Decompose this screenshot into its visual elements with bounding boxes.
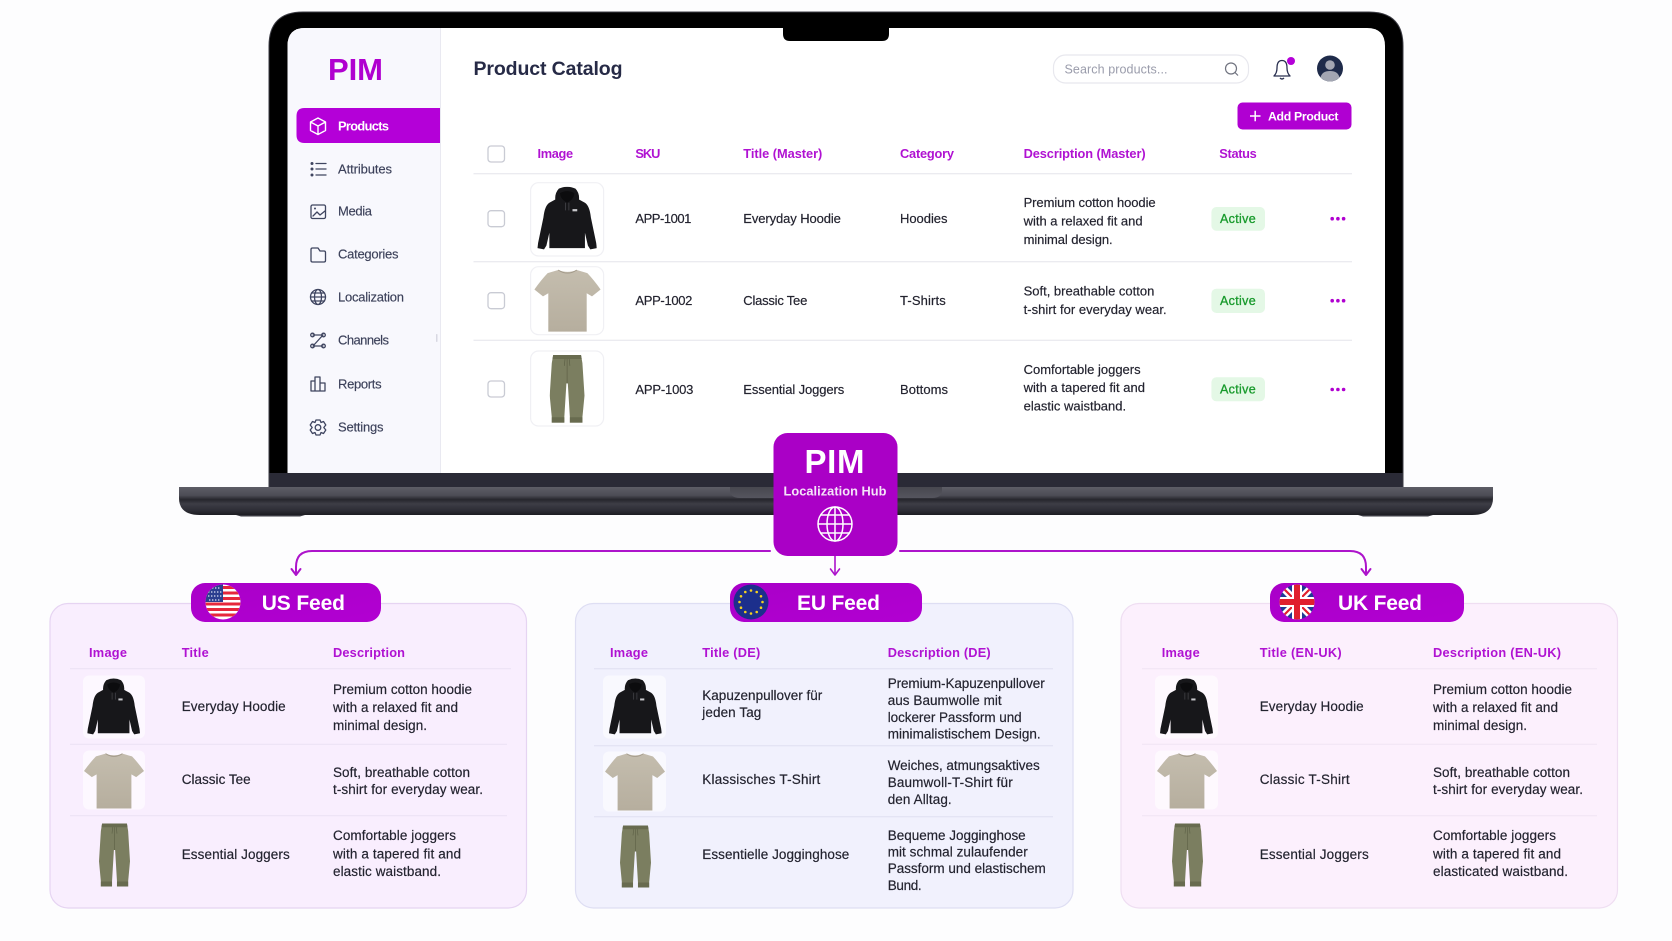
table header: Status bbox=[1219, 146, 1257, 161]
panel background bbox=[50, 604, 526, 908]
table header: Description (EN-UK) bbox=[1433, 645, 1561, 660]
table header: Image bbox=[89, 645, 127, 660]
row: joggers: Essentielle Jogginghose bbox=[702, 847, 849, 862]
row: APP-1003 bbox=[488, 351, 1345, 426]
row: APP-1001: Hoodies bbox=[900, 211, 948, 226]
row: tee: Classic T-Shirt bbox=[1260, 772, 1350, 787]
table header bbox=[1162, 645, 1561, 660]
row: APP-1001: APP-1001 bbox=[635, 211, 691, 226]
logo: PIM bbox=[328, 52, 383, 87]
row: hoodie: with a relaxed fit and bbox=[332, 700, 458, 715]
row: hoodie: Kapuzenpullover für bbox=[702, 688, 823, 703]
row: APP-1003: APP-1003 bbox=[635, 382, 693, 397]
table header: Image bbox=[1162, 645, 1200, 660]
row: joggers: Essential Joggers bbox=[1260, 847, 1369, 862]
row: APP-1001: minimal design. bbox=[1024, 232, 1113, 247]
badge: UK feed bbox=[1270, 583, 1464, 622]
row: hoodie: Everyday Hoodie bbox=[1260, 699, 1364, 714]
row: APP-1003: elastic waistband. bbox=[1024, 398, 1126, 414]
row: joggers: Bund. bbox=[888, 878, 922, 893]
master product table bbox=[474, 146, 1352, 426]
nav item: categories: Categories bbox=[338, 246, 399, 262]
panel: UK feed bbox=[1121, 583, 1618, 908]
nav item: media bbox=[311, 204, 373, 218]
row: hoodie: Everyday Hoodie bbox=[182, 699, 286, 714]
table header: Title (EN-UK) bbox=[1260, 645, 1342, 660]
row: APP-1003: with a tapered fit and bbox=[1023, 380, 1145, 395]
row: tee: Baumwoll-T-Shirt für bbox=[888, 775, 1013, 790]
nav item: settings bbox=[310, 420, 384, 435]
nav item: attributes bbox=[310, 162, 392, 176]
table header: Description (DE) bbox=[888, 645, 991, 660]
page title: Product Catalog bbox=[474, 58, 622, 80]
row: hoodie: jeden Tag bbox=[701, 705, 761, 720]
feed table bbox=[594, 645, 1053, 893]
icon: notification bell bbox=[1274, 57, 1295, 79]
panel: EU feed bbox=[576, 583, 1073, 908]
add product button: Add Product bbox=[1268, 110, 1338, 124]
PIM localization hub: PIM bbox=[804, 443, 864, 480]
PIM localization hub bbox=[774, 433, 898, 556]
badge: US feed bbox=[191, 583, 381, 622]
icon: EU flag bbox=[734, 584, 768, 620]
row: hoodie: minimal design. bbox=[1433, 718, 1527, 733]
row: APP-1001: with a relaxed fit and bbox=[1023, 214, 1143, 228]
laptop chin bbox=[270, 473, 1402, 488]
table header bbox=[89, 645, 405, 660]
row: tee: Soft, breathable cotton bbox=[333, 765, 470, 780]
row: APP-1001: Premium cotton hoodie bbox=[1024, 195, 1156, 210]
row: joggers: Essential Joggers bbox=[182, 847, 290, 862]
table header: Title (Master) bbox=[743, 146, 822, 161]
badge: EU feed: EU Feed bbox=[797, 592, 880, 615]
row: hoodie bbox=[603, 676, 1045, 742]
row: APP-1002: t-shirt for everyday wear. bbox=[1024, 302, 1167, 317]
table header bbox=[488, 146, 1257, 162]
laptop base bbox=[179, 487, 1493, 515]
row: APP-1001: Everyday Hoodie bbox=[743, 211, 841, 226]
nav item: channels: Channels bbox=[338, 332, 390, 348]
row: hoodie: lockerer Passform und bbox=[888, 710, 1022, 725]
row: APP-1002: APP-1002 bbox=[635, 293, 692, 308]
table header: Description (Master) bbox=[1024, 146, 1146, 161]
row: APP-1001: Active bbox=[1220, 212, 1256, 226]
badge: US feed: US Feed bbox=[262, 592, 345, 615]
row: joggers: Passform und elastischem bbox=[888, 861, 1046, 876]
table header: SKU bbox=[635, 146, 660, 161]
row: hoodie: Premium-Kapuzenpullover bbox=[888, 676, 1045, 691]
row: tee: t-shirt for everyday wear. bbox=[1433, 782, 1583, 797]
row: tee bbox=[603, 752, 1040, 812]
screen bbox=[288, 28, 1385, 473]
add product button bbox=[1238, 102, 1352, 130]
row: tee: den Alltag. bbox=[888, 792, 952, 807]
laptop lid and bezel bbox=[269, 12, 1403, 487]
nav item: reports bbox=[311, 376, 382, 392]
row: APP-1002: Active bbox=[1220, 294, 1256, 308]
nav item: products: Products bbox=[338, 118, 389, 134]
row: hoodie: Premium cotton hoodie bbox=[333, 682, 472, 697]
arrow: to EU feed bbox=[830, 556, 840, 575]
row: tee: Klassisches T-Shirt bbox=[702, 772, 821, 787]
row: hoodie: Premium cotton hoodie bbox=[1433, 682, 1572, 697]
row: tee: Classic Tee bbox=[182, 772, 251, 787]
row: tee: Soft, breathable cotton bbox=[1433, 765, 1570, 780]
feed table bbox=[70, 645, 511, 886]
nav item: products bbox=[296, 108, 440, 143]
nav item: attributes: Attributes bbox=[338, 162, 392, 176]
laptop bbox=[179, 12, 1493, 516]
nav item: categories bbox=[311, 246, 399, 262]
row: hoodie bbox=[1155, 676, 1572, 738]
row: hoodie: minimalistischem Design. bbox=[888, 726, 1041, 742]
table header: Category bbox=[900, 146, 955, 161]
row: hoodie bbox=[83, 676, 472, 738]
icon: avatar bbox=[1317, 56, 1343, 82]
search box bbox=[1054, 55, 1248, 83]
feed table bbox=[1142, 645, 1597, 886]
row: APP-1003: Bottoms bbox=[900, 382, 948, 397]
row: APP-1002: Classic Tee bbox=[743, 293, 807, 308]
sidebar background bbox=[288, 28, 440, 473]
table header: Title (DE) bbox=[702, 645, 760, 660]
row: joggers: with a tapered fit and bbox=[1432, 846, 1561, 862]
panel: US feed bbox=[50, 583, 526, 908]
row: APP-1003: Essential Joggers bbox=[743, 382, 845, 397]
row: tee: Weiches, atmungsaktives bbox=[888, 758, 1040, 773]
icon: US flag bbox=[205, 584, 241, 620]
row: APP-1002 bbox=[488, 267, 1345, 335]
icon: search bbox=[1226, 63, 1238, 76]
row: joggers: Comfortable joggers bbox=[333, 828, 456, 843]
sidebar bbox=[288, 28, 441, 473]
row: hoodie: with a relaxed fit and bbox=[1432, 700, 1558, 715]
row: tee bbox=[1155, 750, 1583, 810]
row: joggers: with a tapered fit and bbox=[332, 846, 461, 862]
PIM localization hub: Localization Hub bbox=[784, 484, 887, 498]
badge: UK feed: UK Feed bbox=[1338, 592, 1422, 615]
row: hoodie: aus Baumwolle mit bbox=[888, 693, 1002, 708]
nav item: reports: Reports bbox=[338, 376, 382, 392]
base opening notch bbox=[730, 487, 942, 498]
row: joggers: Comfortable joggers bbox=[1433, 828, 1556, 843]
table header bbox=[610, 645, 991, 660]
nav item: media: Media bbox=[338, 204, 373, 218]
row: APP-1003: Active bbox=[1220, 382, 1256, 396]
row: APP-1001 bbox=[488, 183, 1345, 256]
row: tee bbox=[83, 750, 483, 810]
camera notch bbox=[783, 27, 889, 41]
table header: Description bbox=[333, 645, 405, 660]
nav item: settings: Settings bbox=[338, 420, 384, 434]
row: APP-1002: T-Shirts bbox=[900, 293, 946, 308]
row: tee: t-shirt for everyday wear. bbox=[333, 782, 483, 797]
panel background bbox=[1121, 604, 1618, 908]
nav item: localization: Localization bbox=[338, 290, 404, 304]
badge: EU feed bbox=[730, 583, 922, 622]
row: joggers: elastic waistband. bbox=[333, 864, 441, 879]
panel background bbox=[576, 604, 1073, 908]
row: APP-1003: Comfortable joggers bbox=[1024, 362, 1141, 377]
arrow: to UK feed bbox=[900, 551, 1370, 575]
icon: globe bbox=[818, 507, 852, 541]
table header: Title bbox=[182, 645, 209, 660]
table header: Image bbox=[610, 645, 648, 660]
row: APP-1002: Soft, breathable cotton bbox=[1024, 284, 1154, 298]
row: hoodie: minimal design. bbox=[333, 718, 427, 733]
icon: UK flag bbox=[1279, 584, 1315, 620]
arrow: to US feed bbox=[292, 551, 770, 575]
table header: Image bbox=[538, 146, 573, 161]
row: joggers bbox=[620, 826, 1046, 893]
row: joggers bbox=[1172, 824, 1568, 886]
row: joggers: elasticated waistband. bbox=[1433, 864, 1568, 879]
row: joggers: Bequeme Jogginghose bbox=[888, 828, 1026, 843]
laptop feet bbox=[236, 515, 1433, 516]
search box: Search products... bbox=[1064, 62, 1168, 76]
nav item: channels bbox=[311, 332, 438, 348]
row: joggers bbox=[99, 824, 461, 886]
connector arrows bbox=[292, 551, 1370, 575]
row: joggers: mit schmal zulaufender bbox=[888, 844, 1028, 860]
